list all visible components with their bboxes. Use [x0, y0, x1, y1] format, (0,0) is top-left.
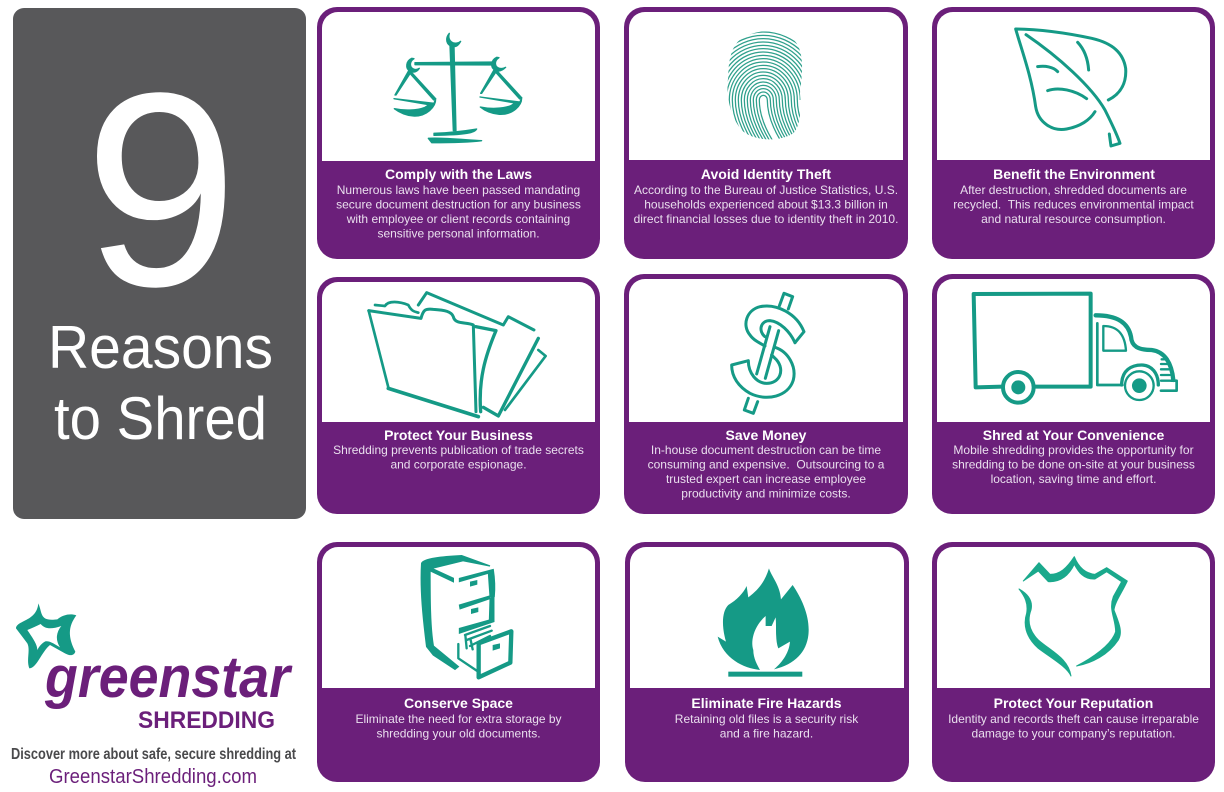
card body: and a fire hazard.: [720, 726, 813, 740]
panel: Protect Your Business: [317, 277, 600, 514]
card heading: Conserve Space: [404, 695, 513, 711]
website link: GreenstarShredding.com: [49, 766, 257, 788]
logo wordmark: greenstar: [44, 645, 293, 710]
heading numeral 9: 9: [84, 36, 238, 344]
card body: Retaining old files is a security risk: [675, 712, 858, 726]
card heading: Protect Your Business: [384, 427, 533, 443]
card body: and corporate espionage.: [390, 458, 527, 472]
card heading: Benefit the Environment: [993, 166, 1155, 182]
title panel: 9 Reasons to Shred: [13, 8, 306, 519]
card body: Mobile shredding provides the opportunity for: [953, 443, 1194, 457]
card body: secure document destruction for any business: [336, 198, 581, 212]
panel: Protect Your Reputation: [932, 542, 1215, 782]
icon: file folders: [369, 293, 546, 417]
icon: scales of justice: [394, 33, 522, 143]
card body: households experienced about $13.3 billion in: [644, 198, 888, 212]
icon: shield: [1019, 557, 1127, 676]
logo block: Greenstar Shredding: [11, 603, 297, 788]
heading: Reasons: Reasons: [48, 314, 273, 381]
card heading: Comply with the Laws: [385, 166, 532, 182]
card body: Identity and records theft can cause irreparable: [948, 712, 1199, 726]
card body: In-house document destruction can be time: [651, 443, 881, 457]
card heading: Protect Your Reputation: [994, 695, 1153, 711]
panel: Avoid Identity Theft: [624, 7, 908, 259]
card heading: Shred at Your Convenience: [983, 427, 1164, 443]
card body: and natural resource consumption.: [981, 212, 1166, 226]
card body: sensitive personal information.: [377, 226, 540, 240]
logo subtitle: SHREDDING: [138, 707, 275, 734]
card body: with employee or client records containing: [346, 212, 570, 226]
card heading: Save Money: [726, 427, 807, 443]
panel: Save Money: [624, 274, 908, 514]
icon: delivery truck: [974, 294, 1177, 403]
card body: consuming and expensive. Outsourcing to a: [648, 458, 885, 472]
card body: shredding to be done on-site at your business: [952, 458, 1195, 472]
card body: direct financial losses due to identity theft in 2010.: [634, 212, 898, 226]
card heading: Avoid Identity Theft: [701, 166, 831, 182]
card body: damage to your company’s reputation.: [972, 726, 1175, 740]
card body: Eliminate the need for extra storage by: [355, 712, 562, 726]
card body: productivity and minimize costs.: [681, 486, 851, 500]
icon: teal star: [16, 603, 76, 668]
heading: to Shred: to Shred: [54, 385, 267, 452]
icon: filing cabinet: [421, 556, 511, 677]
card body: recycled. This reduces environmental impact: [953, 198, 1194, 212]
card body: location, saving time and effort.: [991, 472, 1156, 486]
call to action: Discover more about safe, secure shredding at: [11, 746, 297, 763]
card body: According to the Bureau of Justice Statistics, U.S.: [634, 183, 898, 197]
card body: shredding your old documents.: [376, 726, 541, 740]
card body: trusted expert can increase employee: [666, 472, 866, 486]
icon: fingerprint: [728, 31, 802, 140]
card body: Numerous laws have been passed mandating: [337, 183, 580, 197]
panel: Comply with the Laws: [317, 7, 600, 259]
panel: Eliminate Fire Hazards: [625, 542, 909, 782]
card body: Shredding prevents publication of trade secrets: [333, 443, 584, 457]
panel: Shred at Your Convenience: [932, 274, 1215, 514]
card body: After destruction, shredded documents are: [960, 183, 1187, 197]
icon: leaf: [1016, 29, 1126, 146]
icon: flame: [718, 568, 809, 677]
card heading: Eliminate Fire Hazards: [691, 695, 842, 711]
icon: dollar sign: [732, 293, 804, 413]
panel: Conserve Space: [317, 542, 600, 782]
panel: Benefit the Environment: [932, 7, 1215, 259]
